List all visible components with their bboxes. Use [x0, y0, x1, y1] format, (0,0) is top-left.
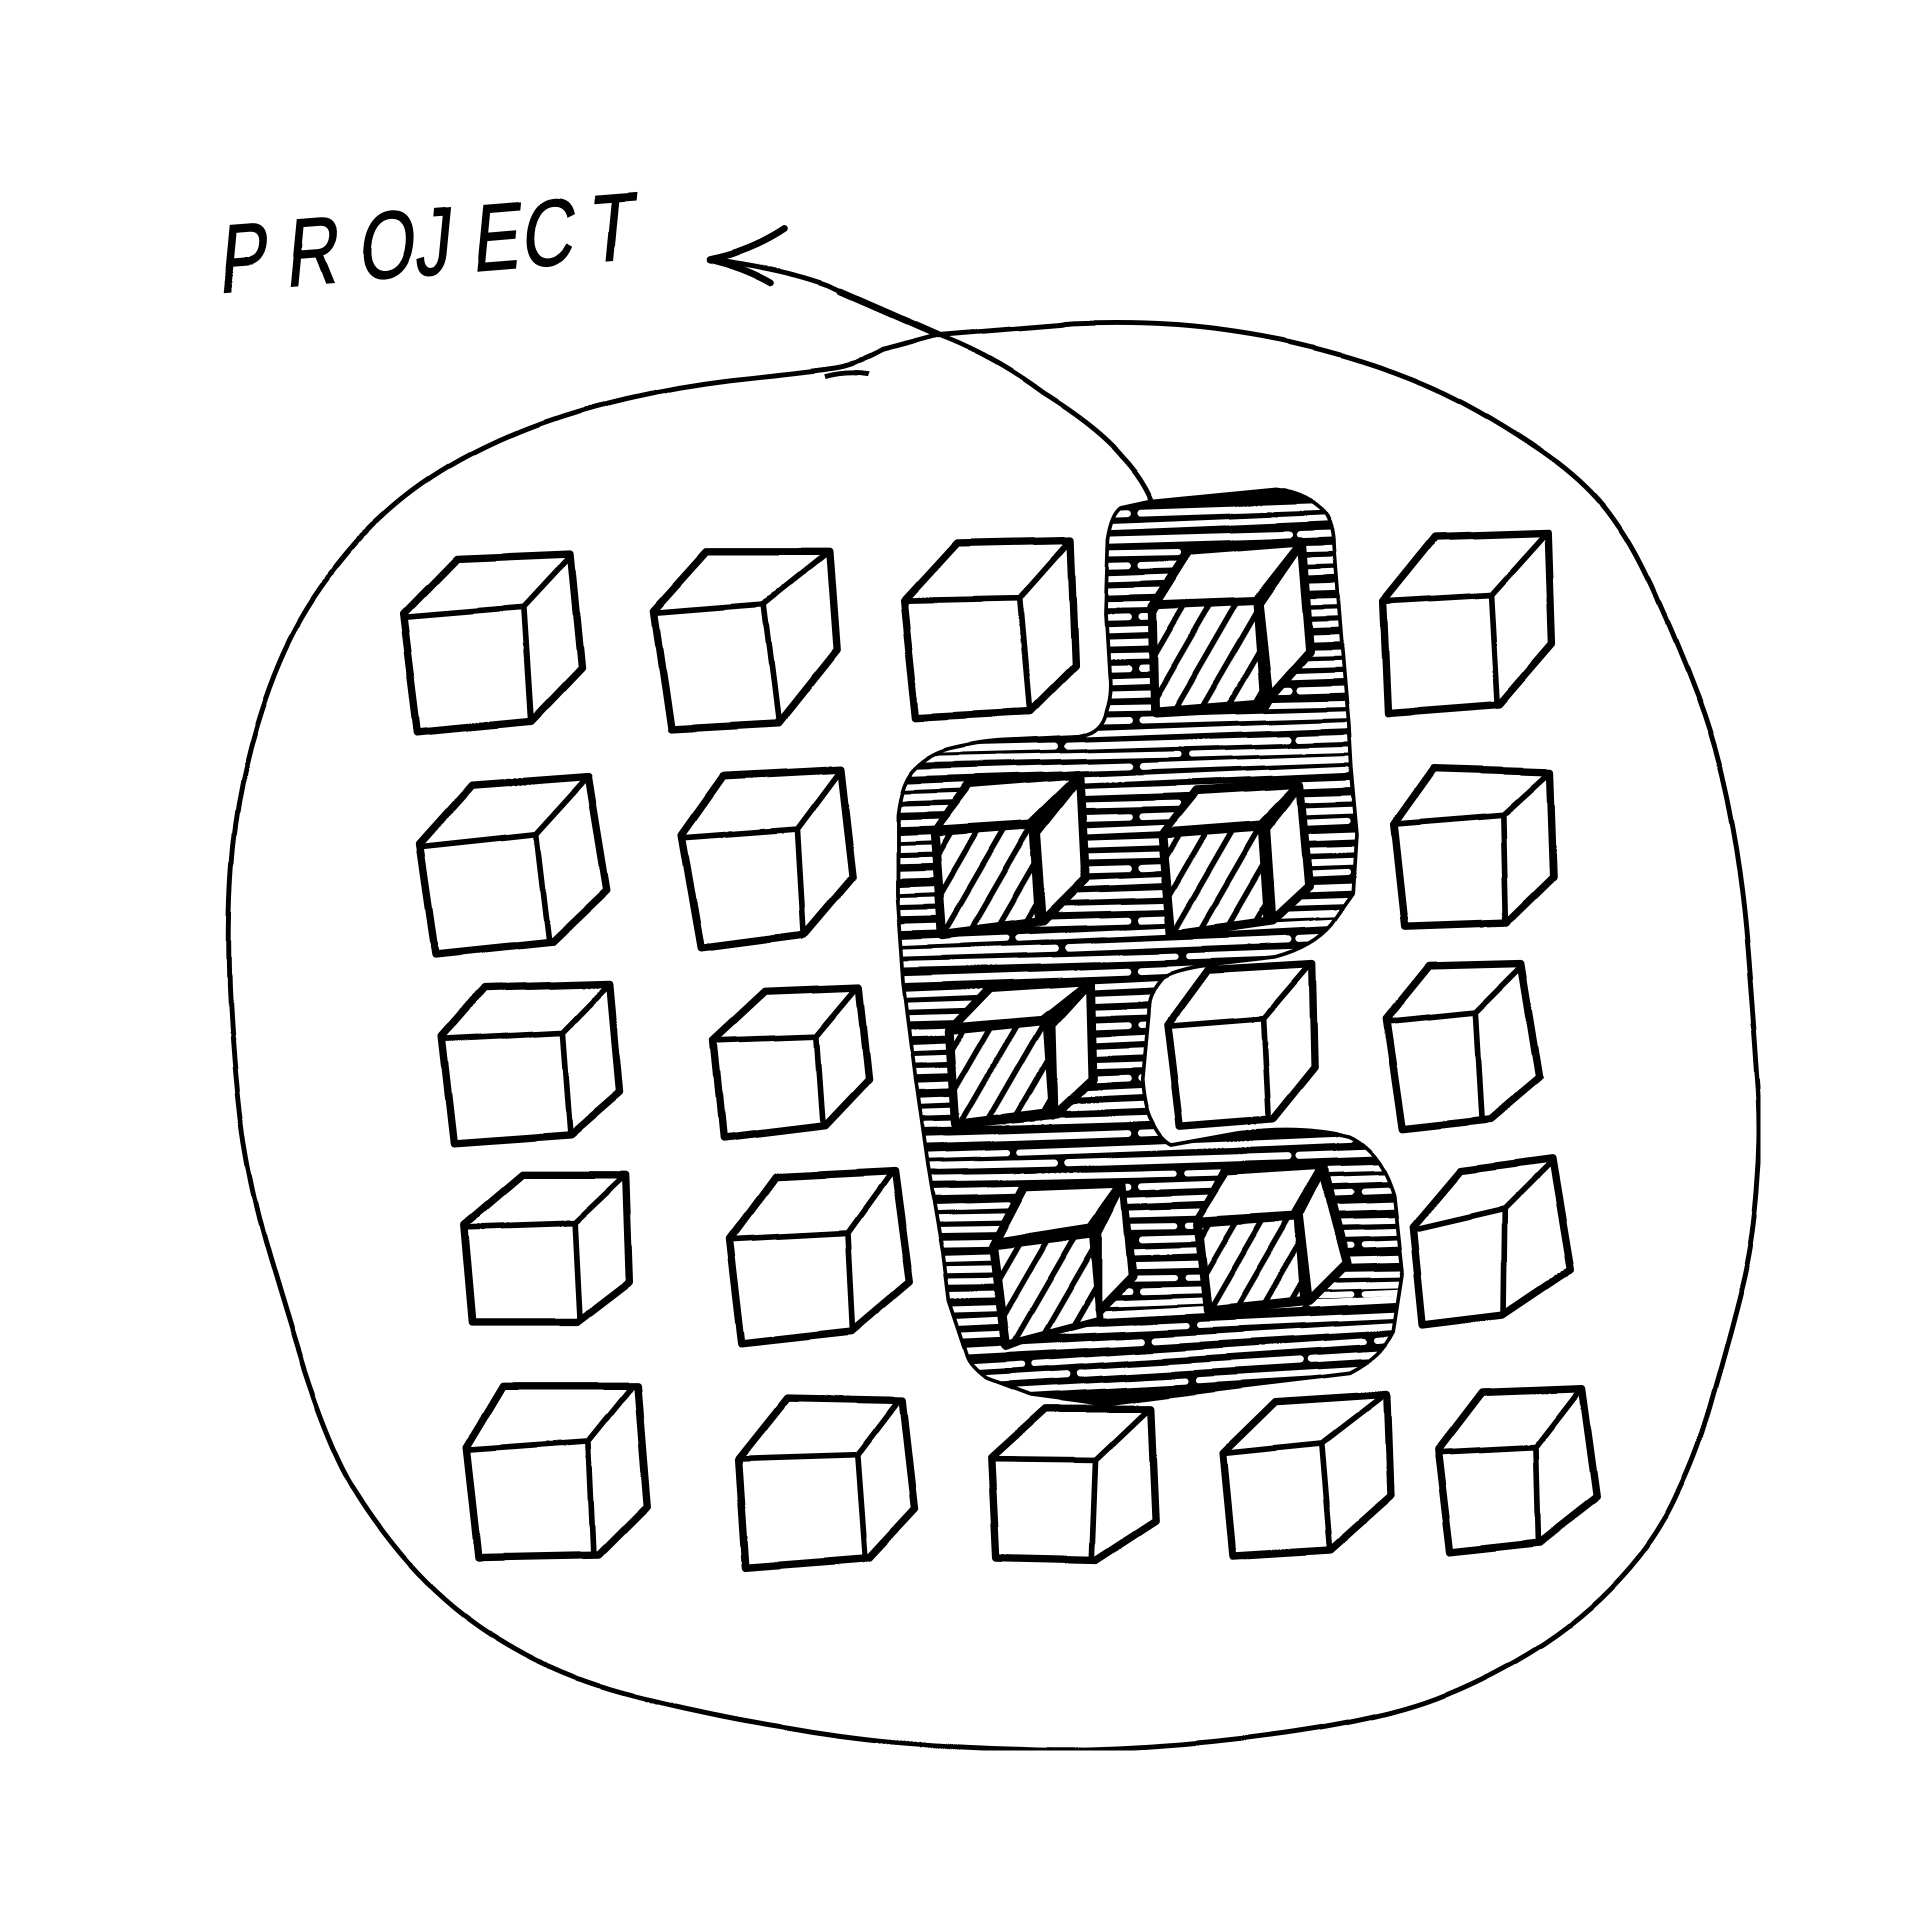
cube row 5 col 5 — [1438, 1389, 1597, 1552]
hatched cube 4 — [951, 981, 1092, 1124]
cube row 2 col 1 — [420, 777, 607, 954]
project boundary outline — [229, 323, 1760, 1750]
hatched cube 3 — [1163, 785, 1309, 934]
title: PROJECT: PROJECT — [216, 173, 640, 313]
cube row 1 col 1 — [404, 555, 582, 732]
hatched cube 5 — [994, 1184, 1131, 1345]
hatched cube 2 — [935, 777, 1084, 934]
horizontal hatching — [900, 503, 1400, 1392]
arrow: from highlighted blocks to project label — [709, 229, 1153, 503]
cube row 3 col 4 — [1168, 963, 1315, 1126]
cube row 3 col 5 — [1386, 963, 1540, 1129]
cube row 5 col 3 — [991, 1408, 1156, 1560]
cube row 1 col 5 — [1383, 532, 1552, 714]
hatched block group: highlighted project blocks — [896, 487, 1404, 1406]
cube row 3 col 1 — [442, 984, 620, 1143]
cube row 4 col 1 — [464, 1175, 629, 1322]
cube row 5 col 4 — [1223, 1395, 1390, 1556]
cube row 1 col 3 — [904, 541, 1076, 718]
cube row 2 col 2 — [682, 769, 853, 948]
cube row 5 col 2 — [739, 1399, 914, 1568]
cube row 1 col 2 — [654, 551, 837, 730]
blob background — [899, 491, 1401, 1402]
cube row 2 col 5 — [1394, 769, 1553, 926]
hatched cube 1 — [1153, 542, 1309, 712]
cube row 4 col 5 — [1413, 1159, 1570, 1325]
cube row 3 col 2 — [714, 988, 869, 1138]
cube row 5 col 1 — [466, 1386, 648, 1558]
cube row 4 col 2 — [730, 1172, 910, 1343]
hatched cube 6 — [1196, 1165, 1347, 1310]
